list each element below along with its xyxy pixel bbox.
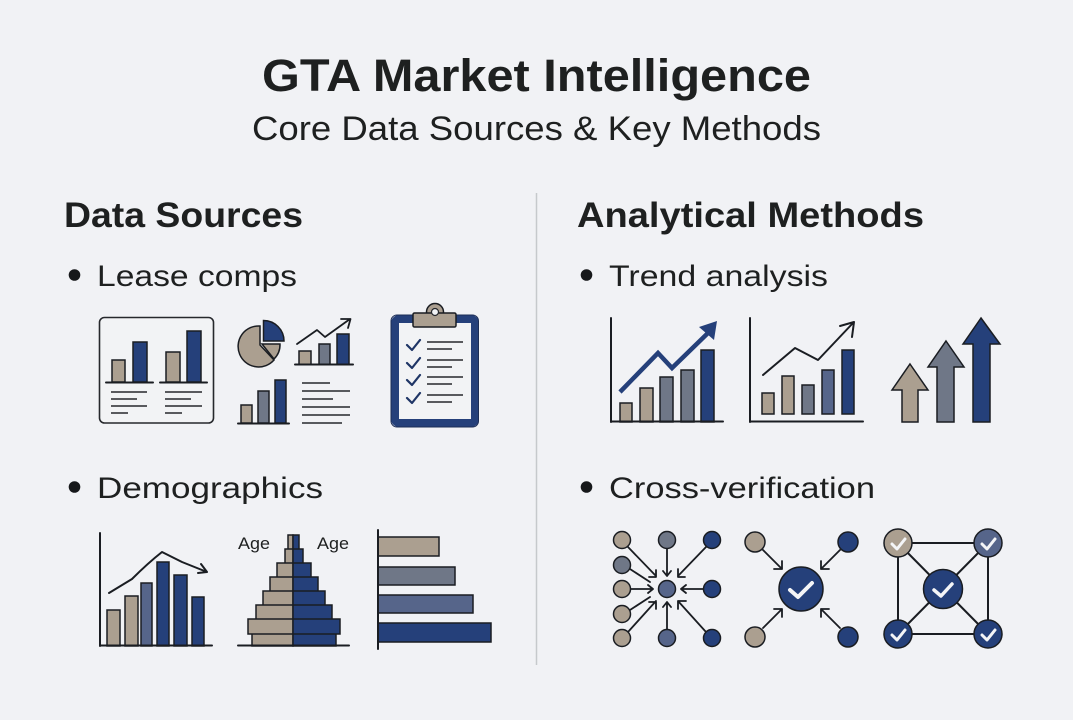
icon: four sources to verified check [745, 532, 858, 647]
icon: report card with bars [100, 318, 214, 423]
panel: analytical methods [577, 196, 1002, 648]
title: GTA Market Intelligence [262, 50, 811, 101]
label: age left: Age [238, 534, 270, 553]
heading: data sources: Data Sources [64, 196, 303, 235]
bullet: cross-verification: Cross-verification [609, 472, 875, 505]
bullet: demographics: Demographics [97, 472, 323, 505]
icon: verified network [884, 529, 1002, 648]
icon: age pyramid [238, 534, 349, 646]
icon: bar chart with peak curve [100, 533, 212, 646]
icon: text lines [302, 383, 350, 423]
icon: small bar chart with trend arrow [295, 319, 353, 364]
icon: small bar chart [238, 380, 289, 424]
icon: three rising arrows [892, 318, 1000, 422]
panel: data sources [64, 196, 491, 649]
icon: trend chart with bold arrow [611, 318, 723, 422]
icon: pie chart [238, 320, 284, 367]
subtitle: Core Data Sources & Key Methods [252, 110, 821, 148]
bullet: trend analysis: Trend analysis [609, 260, 828, 293]
label: age right: Age [317, 534, 349, 553]
icon: horizontal bar chart [378, 530, 491, 649]
heading: analytical methods: Analytical Methods [577, 196, 924, 235]
icon: many sources converge to hub [614, 532, 720, 646]
icon: clipboard checklist [391, 304, 478, 427]
icon: trend chart with line arrow [750, 318, 863, 422]
bullet: lease comps: Lease comps [97, 260, 297, 293]
